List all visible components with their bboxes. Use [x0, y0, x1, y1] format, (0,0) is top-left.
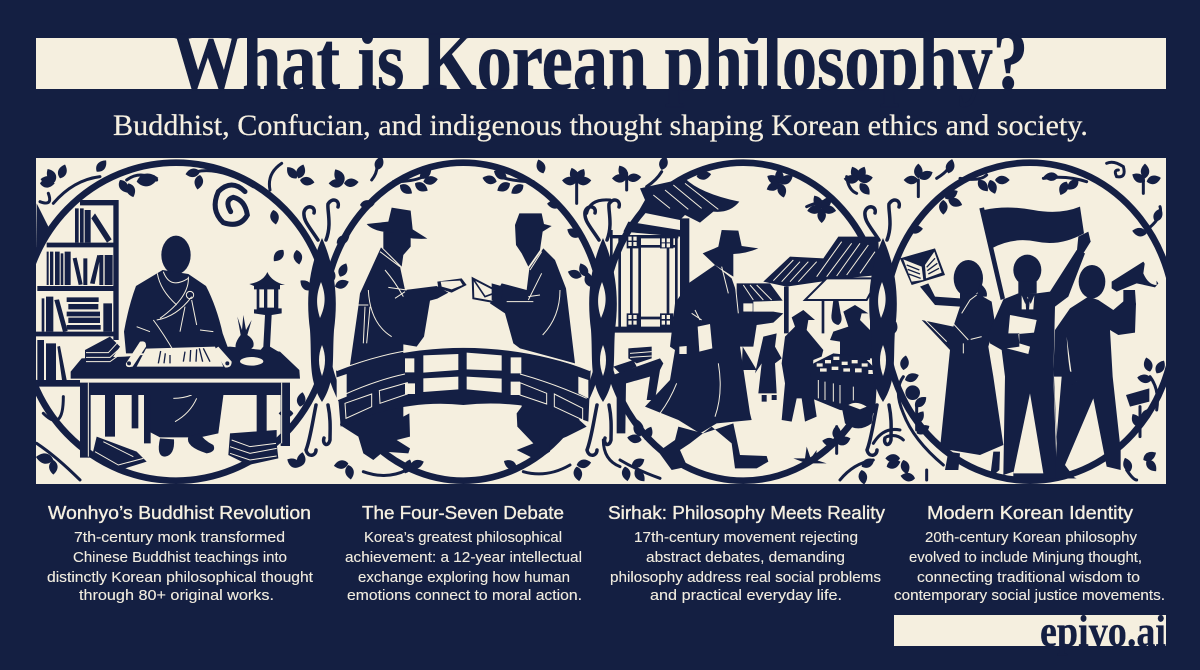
caption 4: Modern Identity: connecting traditional wisdom to [917, 570, 1140, 586]
caption 1: Wonhyo: through 80+ original works. [79, 588, 274, 604]
arched bridge [336, 345, 591, 427]
scholar left [340, 208, 467, 460]
panel 3: Sirhak scholar in marketplace [603, 155, 902, 485]
woman with open book [900, 248, 1003, 478]
books on floor [93, 430, 278, 470]
man with raised fist [988, 232, 1091, 478]
caption 1: Wonhyo: Wonhyo’s Buddhist Revolution [48, 503, 311, 523]
caption 3: Sirhak: philosophy address real social problems [610, 570, 881, 586]
caption 4: Modern Identity: Modern Korean Identity [927, 503, 1133, 523]
caption 2: Four-Seven: achievement: a 12-year intellectual [345, 550, 582, 566]
caption 3: Sirhak: Sirhak: Philosophy Meets Reality [608, 503, 885, 523]
caption 2: Four-Seven: The Four-Seven Debate [362, 503, 564, 523]
vine junctions between arches [304, 200, 899, 455]
caption 1: Wonhyo: Chinese Buddhist teachings into [73, 550, 287, 566]
bookshelf [36, 200, 119, 387]
arch frame [603, 155, 902, 485]
caption 1: Wonhyo [47, 503, 313, 604]
market stalls and villagers [737, 237, 880, 428]
brand name: epivo.ai [1040, 607, 1166, 656]
caption 2: Four-Seven: Korea’s greatest philosophical [364, 530, 562, 546]
caption 1: Wonhyo: distinctly Korean philosophical thought [47, 570, 313, 586]
panel 1: Wonhyo monk at desk [22, 158, 330, 481]
protest flag [979, 207, 1084, 300]
caption 2: Four-Seven [345, 503, 582, 604]
arch frame [885, 158, 1175, 483]
stacked books on desk [85, 337, 121, 363]
panel 4: modern Korean identity figures [885, 158, 1175, 483]
caption 3: Sirhak [608, 503, 885, 604]
caption 3: Sirhak: and practical everyday life. [650, 588, 842, 604]
footer brand [894, 607, 1166, 656]
arch frame [22, 158, 330, 481]
monk figure [124, 236, 230, 457]
caption 4: Modern Identity: contemporary social justice movements. [894, 588, 1165, 604]
lantern and ink pot [235, 272, 285, 367]
caption 3: Sirhak: 17th-century movement rejecting [634, 530, 858, 546]
man with megaphone [1053, 262, 1158, 478]
writing desk [71, 272, 300, 470]
subtitle: Buddhist, Confucian, and indigenous thought shaping Korean ethics and society. [113, 109, 1088, 142]
scholar right [473, 213, 587, 460]
caption 4: Modern Identity [894, 503, 1165, 604]
illustration band [22, 155, 1175, 485]
arch frame [323, 155, 620, 482]
caption 4: Modern Identity: evolved to include Minjung thought, [909, 550, 1142, 566]
walking scholar with book [645, 230, 783, 470]
title banner [36, 15, 1166, 108]
caption 3: Sirhak: abstract debates, demanding [646, 550, 845, 566]
caption 2: Four-Seven: emotions connect to moral action. [347, 588, 582, 604]
panel 2: Four-Seven debate scholars on bridge [323, 155, 620, 482]
caption 1: Wonhyo: 7th-century monk transformed [74, 530, 285, 546]
title: What is Korean philosophy? [172, 15, 1028, 108]
caption 2: Four-Seven: exchange exploring how human [358, 570, 570, 586]
traditional pavilion [610, 178, 739, 333]
caption 4: Modern Identity: 20th-century Korean philosophy [925, 530, 1138, 546]
side table with books [608, 347, 663, 433]
